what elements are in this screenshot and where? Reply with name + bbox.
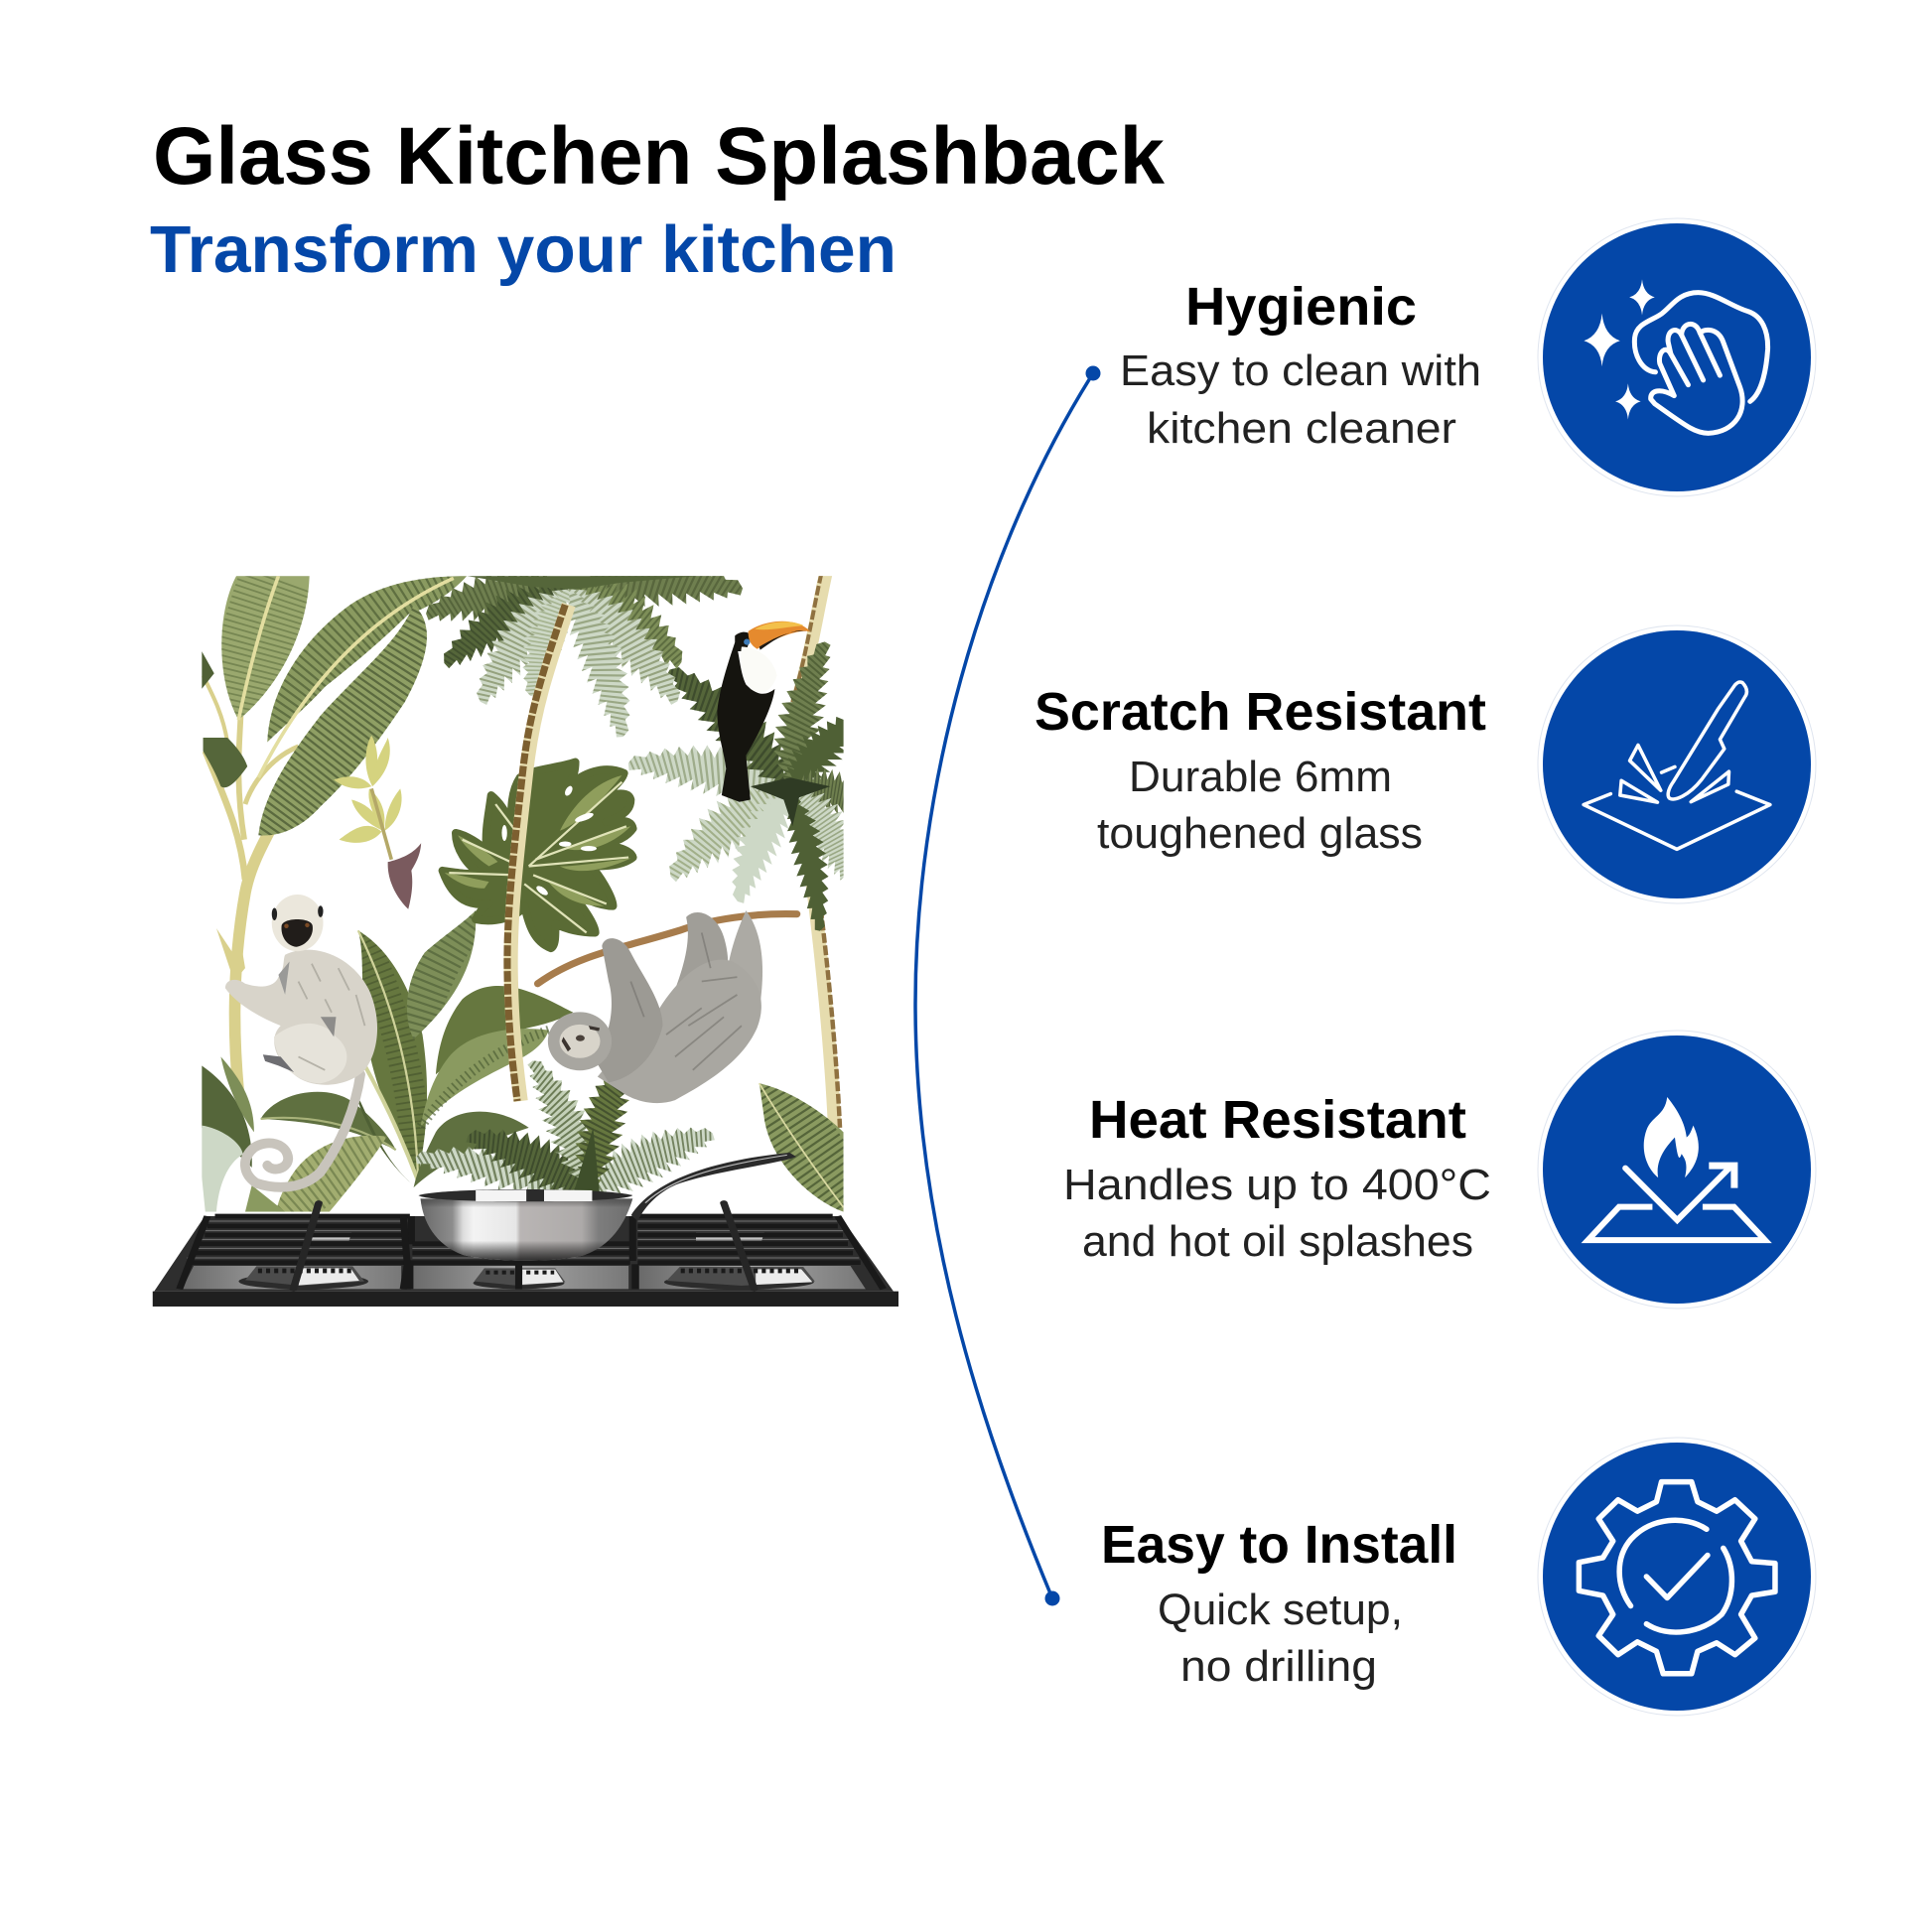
grate highlights — [187, 1221, 859, 1258]
banana leaf lower — [258, 605, 427, 836]
feature: Scratch Resistant: Durable 6mm — [1129, 753, 1392, 801]
banana flower — [388, 843, 421, 909]
branch — [538, 914, 797, 984]
feature: Easy to Install — [1101, 1515, 1457, 1691]
feature: Hygienic: kitchen cleaner — [1147, 404, 1456, 453]
banana bunch — [334, 736, 402, 860]
upper burners — [311, 1233, 764, 1240]
hob front edge — [153, 1292, 898, 1307]
pan body — [419, 1189, 632, 1261]
grates — [180, 1216, 884, 1289]
burner plates — [182, 1266, 866, 1289]
icon: flame and heat — [1538, 1031, 1816, 1309]
central palm trunk — [507, 605, 569, 1101]
connector curve — [915, 365, 1100, 1606]
icon: knife scratching glass — [1538, 625, 1816, 903]
banana leaf upper — [258, 576, 467, 777]
lower broad leaves — [202, 910, 844, 1212]
icon: cleaning hand — [1538, 218, 1816, 496]
feature: Hygienic — [1120, 277, 1481, 453]
bottom left leaves — [202, 1065, 252, 1168]
feature: Hygienic: Easy to clean with — [1120, 346, 1481, 395]
banana leaf left — [221, 576, 310, 720]
burners — [238, 1266, 815, 1290]
subtitle: Transform your kitchen — [150, 212, 897, 287]
feature: Scratch Resistant: Scratch Resistant — [1035, 682, 1486, 742]
pale lower leaf — [276, 1136, 387, 1212]
broad leaf upper right — [407, 910, 476, 1039]
bottom right leaf — [759, 1083, 844, 1212]
gas hob with frying pan — [153, 1153, 898, 1307]
feature: Easy to Install: Quick setup, — [1158, 1586, 1403, 1634]
feature: Easy to Install: no drilling — [1180, 1642, 1377, 1691]
title: Glass Kitchen Splashback — [153, 111, 1165, 202]
feature: Scratch Resistant: toughened glass — [1097, 809, 1423, 858]
feature: Heat Resistant: Heat Resistant — [1089, 1090, 1466, 1150]
product illustration: jungle glass splashback — [202, 576, 844, 1212]
feature: Scratch Resistant — [1035, 682, 1486, 858]
feature: Heat Resistant: and hot oil splashes — [1082, 1217, 1473, 1266]
feature: Heat Resistant — [1063, 1090, 1491, 1266]
banana plant — [202, 576, 467, 1092]
feature: Heat Resistant: Handles up to 400°C — [1063, 1161, 1491, 1209]
bottom palm fronds — [415, 1060, 715, 1193]
pan handle — [631, 1153, 796, 1221]
feature: Hygienic: Hygienic — [1185, 277, 1417, 337]
hob surface — [154, 1216, 894, 1292]
right palm tree — [625, 574, 886, 1128]
icon: gear with check — [1538, 1438, 1816, 1716]
feature: Easy to Install: Easy to Install — [1101, 1515, 1457, 1575]
banana small folded leaf — [204, 738, 247, 787]
toucan — [717, 621, 810, 802]
sloth — [548, 910, 762, 1103]
monkey — [225, 895, 377, 1187]
monstera leaf — [443, 762, 633, 948]
central palm fronds — [426, 576, 743, 737]
broad leaf tall — [358, 930, 427, 1176]
